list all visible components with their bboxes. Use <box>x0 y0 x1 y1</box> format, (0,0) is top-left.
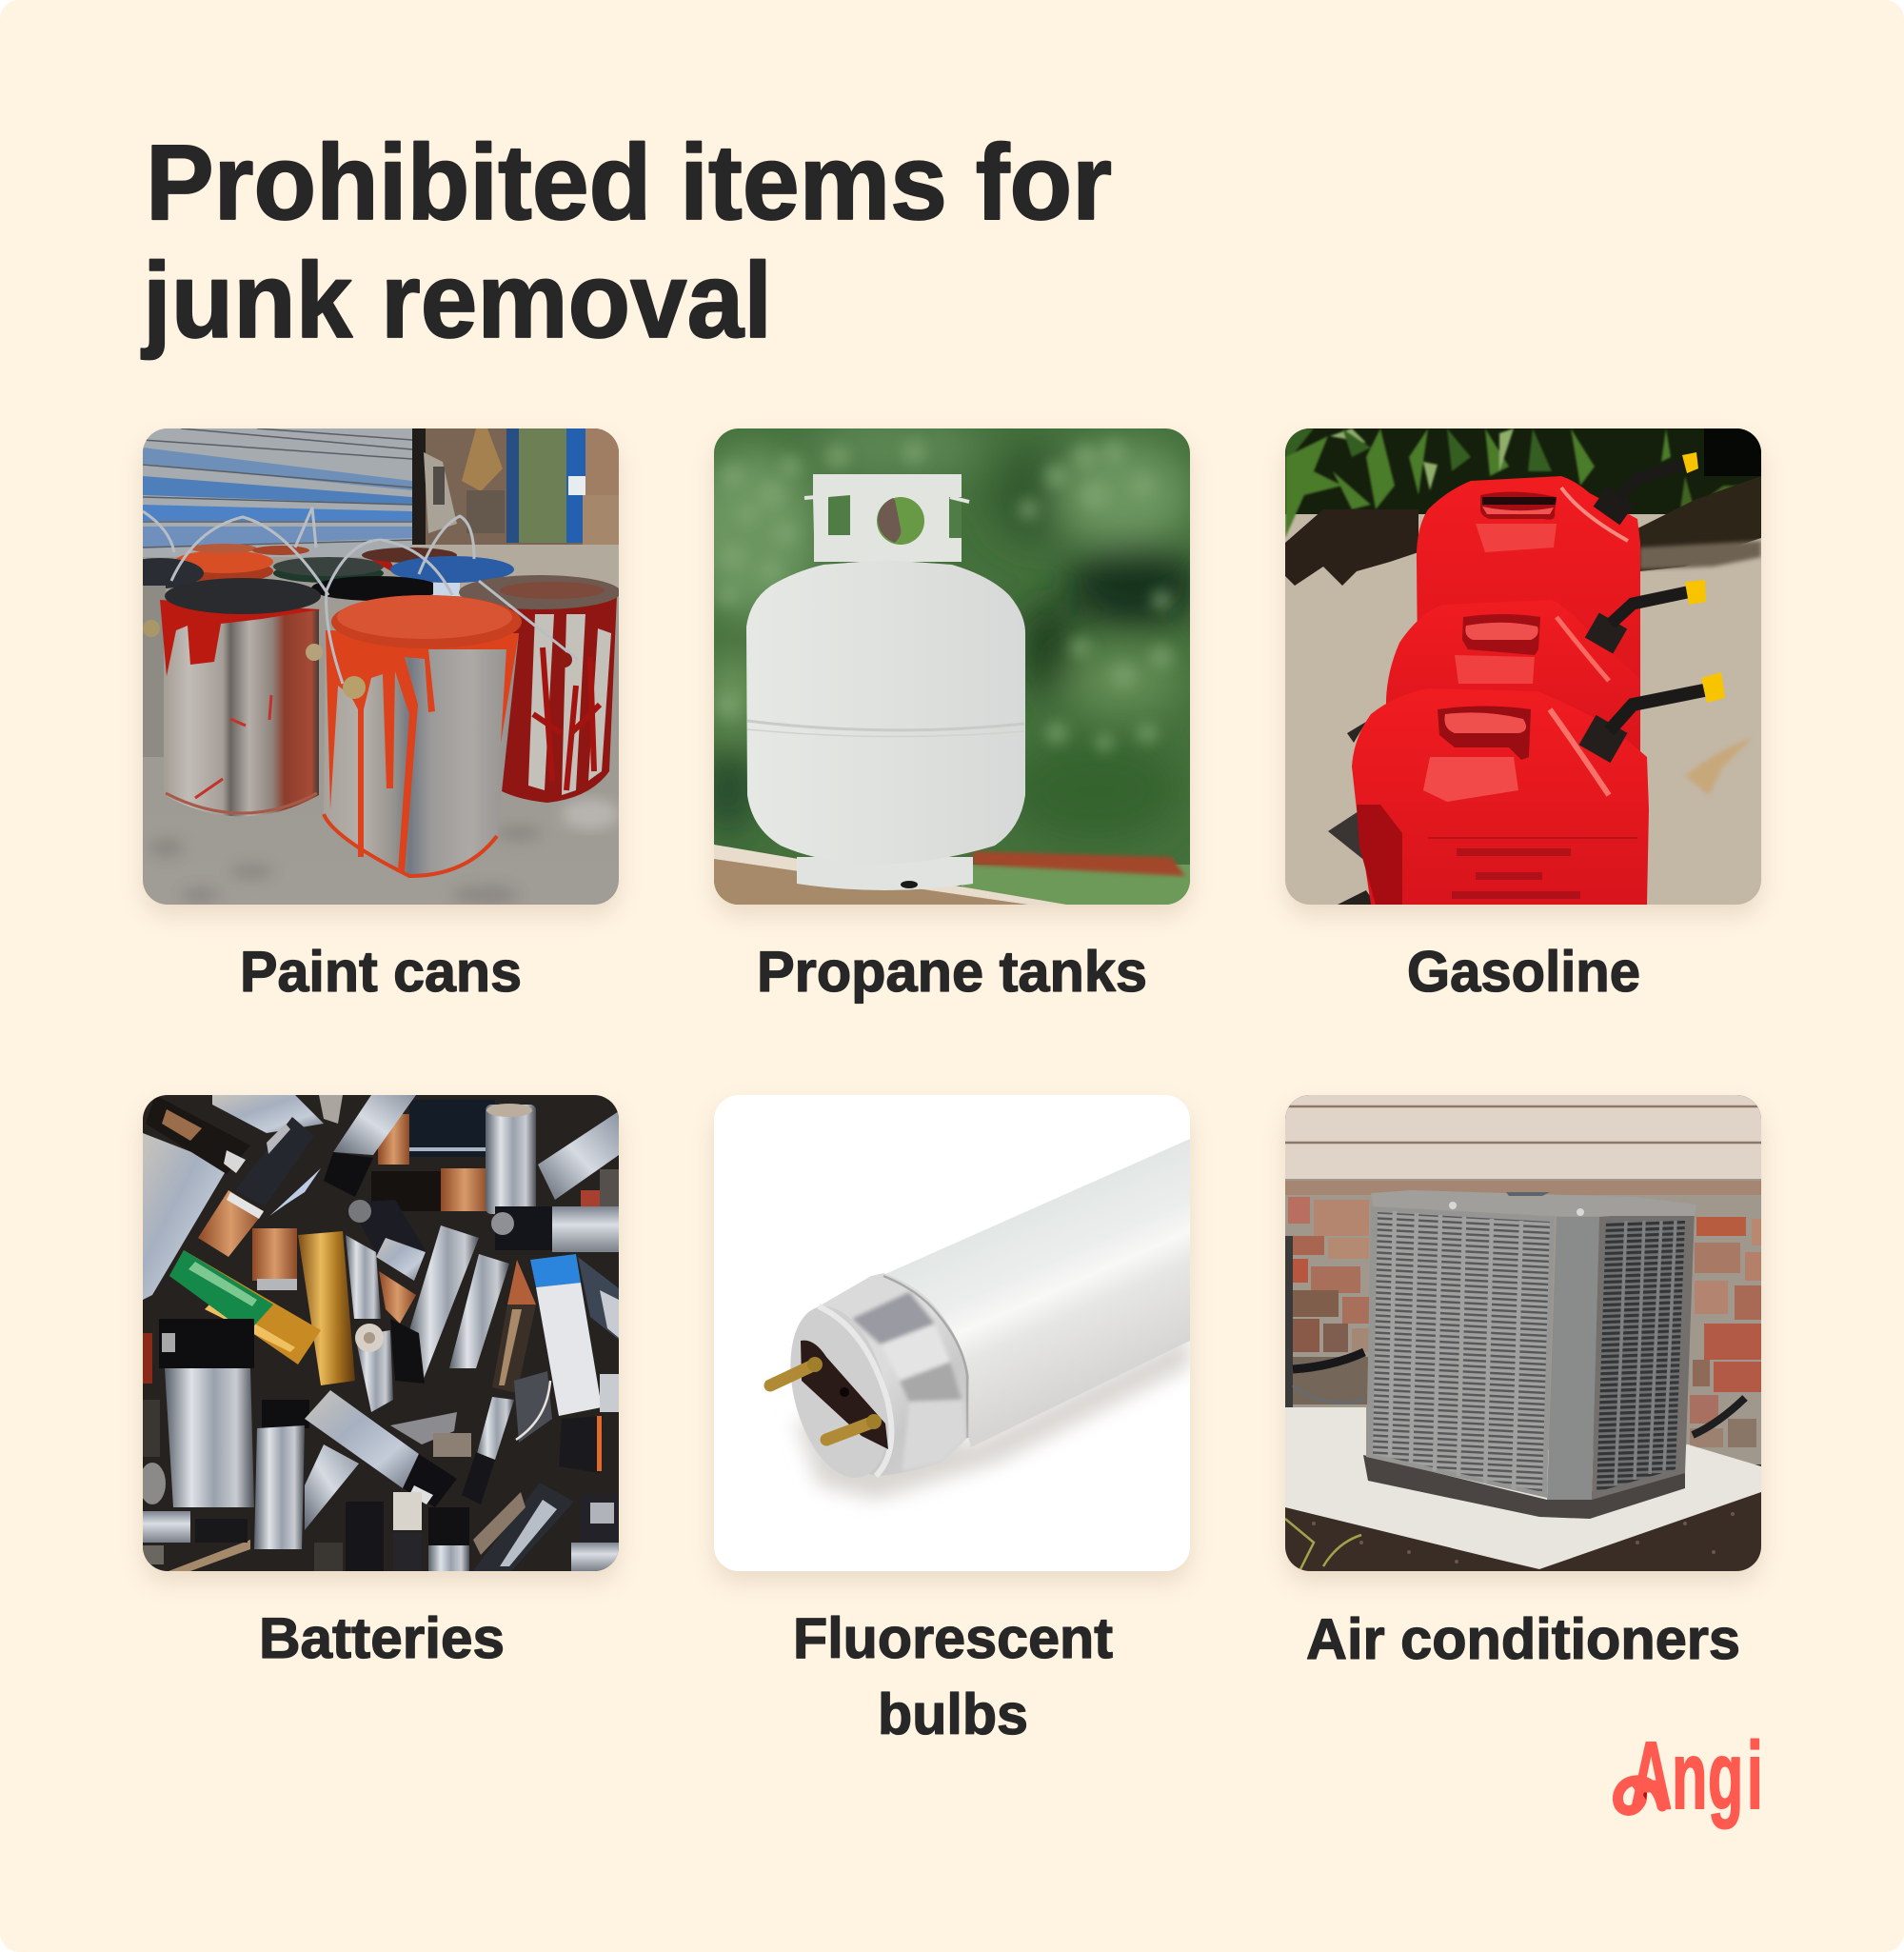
panel: propane tanks <box>685 414 1200 1004</box>
panel: fluorescent bulbs <box>714 1095 1190 1746</box>
panel: batteries <box>139 1095 619 1670</box>
label: paint cans: Paint cans <box>240 940 522 1004</box>
logo: Angi: Angi <box>1630 1722 1763 1829</box>
label: propane tanks: Propane tanks <box>757 940 1147 1004</box>
title: Prohibited items for <box>146 123 1112 242</box>
image: air conditioner <box>1285 1095 1761 1571</box>
title: junk removal <box>141 241 772 360</box>
label: air conditioners: Air conditioners <box>1306 1607 1740 1671</box>
image: fluorescent bulb <box>714 1095 1190 1571</box>
image: gasoline cans <box>1285 428 1761 905</box>
image: batteries <box>139 1095 619 1571</box>
image: paint cans <box>116 428 621 905</box>
panel: gasoline <box>1285 428 1761 1004</box>
label: gasoline: Gasoline <box>1407 940 1640 1004</box>
panel: air conditioners <box>1285 1095 1761 1671</box>
label: fluorescent bulbs <box>793 1606 1113 1746</box>
title <box>141 123 1112 360</box>
label: fluorescent bulbs: Fluorescent <box>793 1606 1113 1670</box>
panel: paint cans <box>116 428 621 1004</box>
label: fluorescent bulbs: bulbs <box>878 1683 1028 1746</box>
image: propane tank <box>714 428 1190 905</box>
label: batteries: Batteries <box>259 1606 505 1670</box>
